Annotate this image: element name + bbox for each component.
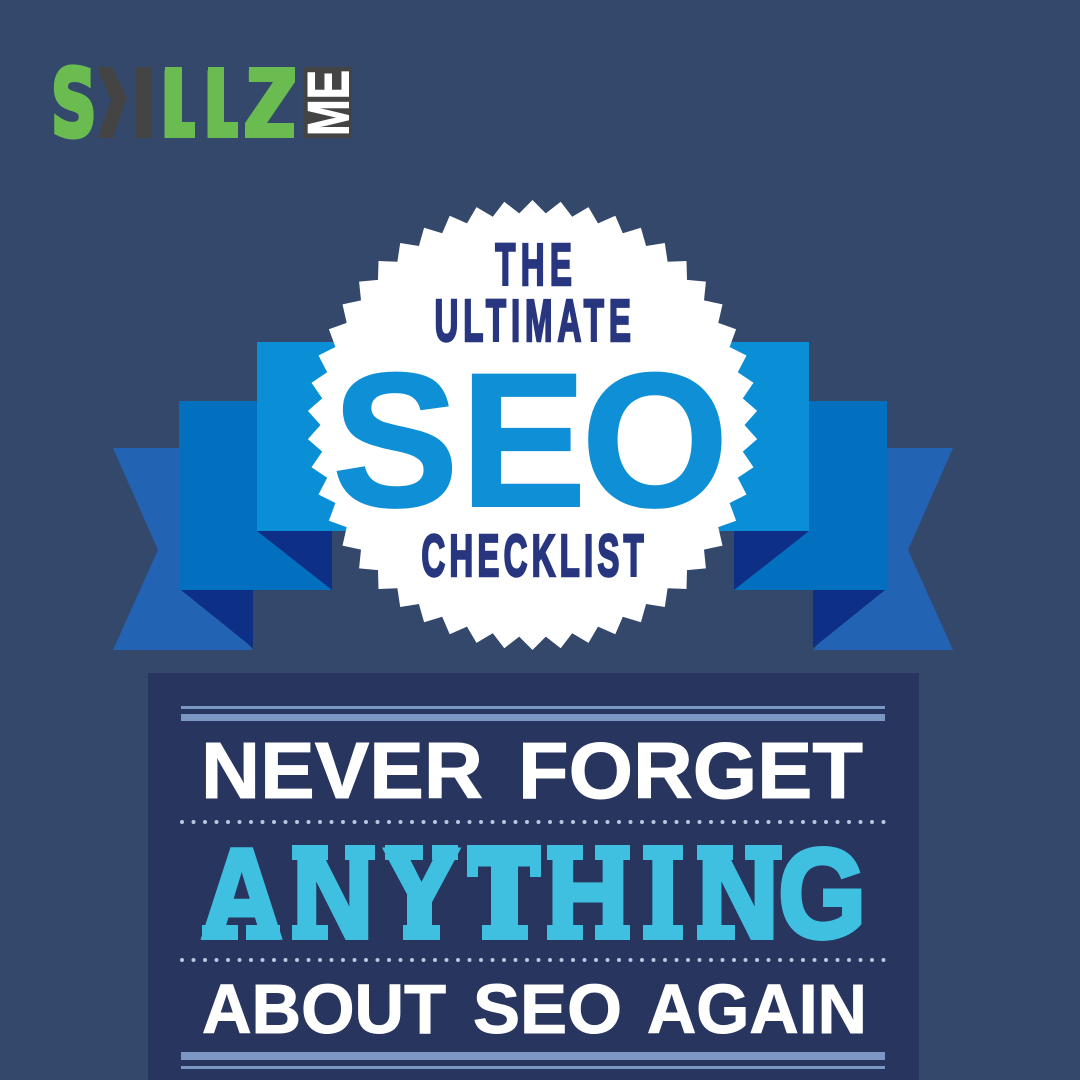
headline: NEVER FORGET: FORGET — [518, 726, 863, 815]
top double rule — [181, 706, 885, 721]
headline: ABOUT SEO AGAIN — [202, 970, 867, 1048]
ribbon fold upper left — [257, 531, 332, 590]
badge text: SEO: SEO — [332, 334, 728, 547]
headline: ABOUT SEO AGAIN: SEO — [473, 970, 622, 1048]
panel: tagline — [148, 673, 919, 1080]
badge text: THE: THE — [495, 233, 572, 299]
badge text: ULTIMATE: ULTIMATE — [434, 289, 631, 355]
headline: NEVER FORGET — [201, 726, 863, 815]
logo: SKILLZ ME — [51, 49, 362, 160]
headline: NEVER FORGET: NEVER — [201, 726, 483, 815]
headline: ANYTHING: ANYTHING — [201, 823, 866, 965]
ribbon fold lower right — [813, 590, 885, 648]
badge text: CHECKLIST: CHECKLIST — [421, 524, 644, 590]
ribbon middle band right — [734, 401, 887, 590]
ribbon back tail right — [813, 448, 953, 650]
logo letter Z: Z — [243, 51, 294, 160]
logo letter L first: L — [161, 50, 195, 159]
headline: ABOUT SEO AGAIN: ABOUT — [202, 970, 446, 1048]
logo letter L second: L — [204, 50, 238, 159]
logo ME box — [303, 67, 352, 138]
ribbon front band left — [257, 342, 347, 531]
headline: ABOUT SEO AGAIN: AGAIN — [647, 970, 867, 1048]
ribbon fold upper right — [734, 531, 809, 590]
logo ME text: ME — [296, 70, 362, 136]
dotted divider lower — [182, 958, 885, 962]
badge: white starburst seal — [308, 200, 757, 650]
ribbon: left — [113, 342, 347, 650]
ribbon back tail left — [113, 448, 253, 650]
ribbon middle band left — [179, 401, 332, 590]
logo bar of K — [136, 67, 152, 138]
dotted divider upper — [182, 820, 885, 824]
ribbon: right — [719, 342, 953, 650]
panel background — [148, 673, 919, 1080]
ribbon fold lower left — [181, 590, 253, 648]
logo chevron of K — [97, 67, 127, 138]
ribbon front band right — [719, 342, 809, 531]
logo letter S: S — [51, 49, 97, 158]
bottom double rule — [181, 1052, 885, 1069]
